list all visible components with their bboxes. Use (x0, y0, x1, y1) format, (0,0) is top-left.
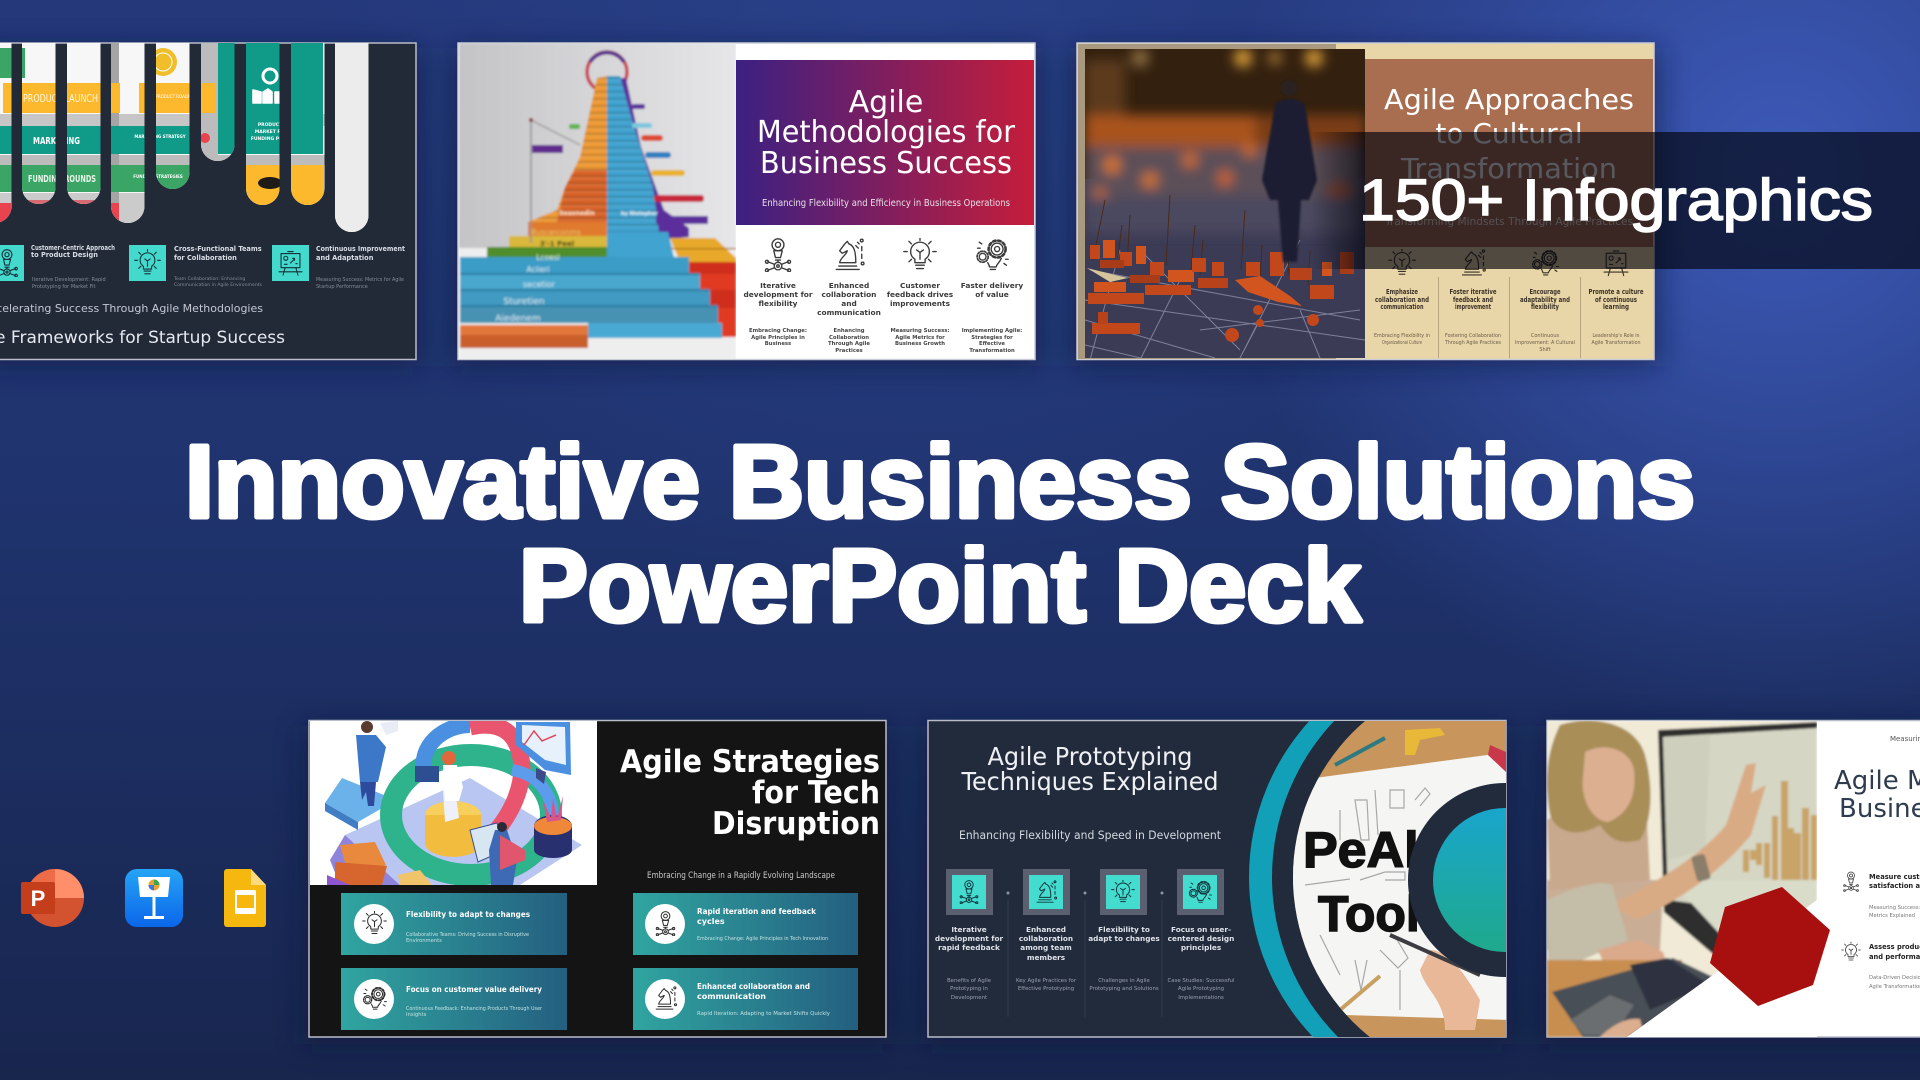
card: enhanced collaboration: communication (697, 992, 766, 1001)
text: cross functional teams: for Collaboration (174, 254, 237, 262)
text: customer centric approach: Iterative Development: Rapid (32, 277, 106, 283)
text: customer centric approach: Customer-Centric Approach (31, 244, 115, 252)
text: continuous improvement (316, 245, 405, 290)
column sublabels: Benefits of Agile (947, 978, 992, 984)
icon: continuous improvement (272, 245, 309, 281)
panel: Agile Strategies for Tech Disruption slide (309, 720, 886, 1037)
column sublabels: Prototyping and Solutions (1089, 986, 1159, 992)
column labels: Flexibility to (1098, 925, 1150, 934)
column labels: communication (1380, 303, 1424, 311)
slide title (757, 85, 1016, 181)
text: cross functional teams: Communication in Agile Environments (174, 282, 263, 288)
image: rainbow staircase: secetior (523, 280, 556, 289)
column labels: development for (935, 934, 1003, 943)
text: cross functional teams: Team Collaboration: Enhancing (173, 276, 245, 282)
icon: businessman silhouette (1262, 80, 1317, 262)
slide title: Agile Strategies (620, 744, 880, 780)
image: rainbow staircase: Sturetien (503, 297, 545, 307)
column labels: feedback and (1453, 296, 1493, 304)
column sublabels: Prototyping in (950, 986, 988, 992)
chart: startup roadmap columns: PRODUCT ROADMAP (155, 94, 197, 99)
column labels: principles (1181, 943, 1221, 952)
column sublabels: Organizational Culture (1382, 340, 1422, 346)
image: rainbow staircase: by Niotepher (621, 211, 658, 217)
column sublabels: Implementations (1178, 995, 1224, 1001)
chart: startup roadmap columns: MARKETING (33, 136, 80, 147)
image: isometric team illustration (310, 721, 597, 885)
chart: startup roadmap columns: MARKET FIT (255, 129, 286, 135)
column labels: adapt to changes (1088, 934, 1160, 943)
text: continuous improvement: Measuring Success: Metrics for Agile (316, 277, 404, 283)
column labels: flexibility (758, 299, 798, 308)
column labels: Customer (900, 281, 940, 290)
column labels: Encourage (1530, 288, 1561, 296)
column labels: among team (1020, 943, 1072, 952)
image: rainbow staircase: Seaxnedin (559, 210, 595, 217)
column labels: communication (817, 308, 881, 317)
chart: startup roadmap columns: FUNDING ROUNDS (28, 174, 96, 185)
column labels: Enhanced (829, 281, 869, 290)
chart: startup roadmap columns (0, 40, 375, 240)
text: customer centric approach (31, 244, 115, 290)
image: circular tool sketch photo: PeAk (1303, 822, 1433, 878)
slide title: Agile Prototyping (988, 742, 1192, 771)
icon: customer centric (0, 245, 24, 281)
column labels: collaboration and (1375, 296, 1429, 304)
card: customer value (341, 968, 567, 1030)
text: cross functional teams (173, 245, 263, 288)
text: cross functional teams: Cross-Functional Teams (174, 245, 262, 253)
slide title (620, 744, 880, 842)
icon: PowerPoint: P (31, 886, 45, 911)
slide title (961, 742, 1218, 796)
column labels: improvement (1455, 303, 1491, 311)
image: circular tool sketch photo (1249, 721, 1506, 1037)
column sublabels: Agile Principles in (751, 335, 805, 341)
column sublabels: Embracing Change: (749, 328, 807, 334)
card: rapid iteration (633, 893, 858, 955)
column sublabels: Shift (1539, 347, 1551, 353)
title: Innovative Business Solutions (185, 424, 1695, 539)
column labels: development for (743, 290, 813, 299)
column labels: Iterative (951, 925, 987, 934)
column sublabels: Strategies for (971, 335, 1013, 341)
shape: red hexagon (1710, 887, 1830, 1006)
icon row (765, 238, 1008, 272)
column sublabels: Business (765, 341, 791, 347)
column dividers (1438, 277, 1580, 358)
image: woman pointing at chart (1545, 721, 1817, 1037)
slide title: Methodologies for (757, 115, 1016, 150)
column sublabels: Transformation (969, 348, 1015, 354)
slide title: Agile (849, 85, 923, 120)
slide title: Business Success (760, 146, 1012, 181)
card: enhanced collaboration: Rapid Iteration: Adapting to Market Shifts Quickly (697, 1011, 830, 1017)
column sublabels: Implementing Agile: (962, 328, 1022, 334)
card: flexibility: Flexibility to adapt to changes (406, 910, 530, 919)
card: rapid iteration: Rapid iteration and feedback (697, 907, 817, 916)
column labels: collaboration (1019, 934, 1073, 943)
column labels: centered design (1168, 934, 1234, 943)
chart: startup roadmap columns: PRODUCT LAUNCH (23, 92, 98, 105)
item: assess product quality (1842, 942, 1920, 990)
column labels: and (841, 299, 857, 308)
card: flexibility: Environments (406, 938, 442, 944)
column labels (743, 281, 1023, 317)
slide title: Transformation (1400, 152, 1617, 185)
column sublabels: Collaboration (829, 335, 869, 341)
column sublabels: Agile Metrics for (895, 335, 945, 341)
image: businessman on city map (1085, 49, 1365, 360)
step separators (1006, 892, 1164, 1017)
column sublabels: Business Growth (895, 341, 945, 347)
header panel (1365, 59, 1653, 247)
column labels: rapid feedback (938, 943, 1000, 952)
column labels: improvements (890, 299, 951, 308)
icon row (946, 869, 1224, 915)
item: measure customer satisfaction: Metrics Explained (1869, 913, 1915, 919)
column sublabels: Effective (979, 341, 1005, 347)
card: customer value: Continuous Feedback: Enhancing Products Through User (406, 1006, 543, 1012)
image: rainbow staircase: Lcoesl (536, 253, 560, 262)
icon: PowerPoint (21, 869, 84, 927)
panel: Agile Metrics for Business slide (1545, 720, 1920, 1037)
title (185, 424, 1695, 643)
text: continuous improvement: Continuous Improvement (316, 245, 405, 253)
text: customer centric approach: to Product Design (31, 251, 98, 259)
column labels: Iterative (760, 281, 796, 290)
column sublabels: Enhancing (833, 328, 865, 334)
column sublabels: Continuous (1531, 333, 1560, 339)
column labels: members (1027, 953, 1065, 962)
image: rainbow staircase: Aciieri (526, 265, 550, 274)
column labels: of value (975, 290, 1009, 299)
column sublabels: Key Agile Practices for (1016, 978, 1077, 984)
subtitle: Embracing Change in a Rapidly Evolving Landscape (647, 871, 835, 881)
column sublabels: Through Agile Practices (1444, 340, 1501, 346)
chart: startup roadmap columns: PRODUCT (258, 122, 283, 128)
image: circular tool sketch photo: Tool (1318, 886, 1420, 942)
image: rainbow staircase: Buscerconms (531, 228, 581, 237)
image: rainbow staircase: Aiedenem (495, 314, 541, 324)
column labels: Focus on user- (1171, 925, 1231, 934)
text: continuous improvement: Startup Performance (316, 284, 368, 290)
card: rapid iteration: cycles (697, 917, 725, 926)
column sublabels: Embracing Flexibility in (1374, 333, 1430, 339)
column labels: Faster delivery (961, 281, 1023, 290)
column labels (935, 925, 1234, 962)
panel: Agile Approaches to Cultural Transformation slide (1077, 43, 1654, 360)
card: rapid iteration: Embracing Change: Agile Principles in Tech Innovation (697, 936, 828, 942)
image: rainbow staircase (459, 43, 736, 360)
icon: Keynote (125, 869, 183, 927)
card: flexibility (341, 893, 567, 955)
subtitle: Enhancing Flexibility and Speed in Development (959, 829, 1222, 842)
text: continuous improvement: and Adaptation (316, 254, 374, 262)
column labels: Enhanced (1026, 925, 1066, 934)
card: flexibility: Collaborative Teams: Driving Success in Disruptive (406, 932, 529, 938)
column sublabels: Case Studies: Successful (1168, 978, 1234, 984)
card: customer value: Focus on customer value delivery (406, 985, 543, 994)
column sublabels: Effective Prototyping (1018, 986, 1074, 992)
chart: startup roadmap columns: FUNDING STRATEGIES (133, 174, 183, 179)
callout: 150+ Infographics band (1310, 132, 1920, 269)
icon: Google Slides (224, 869, 266, 927)
card: customer value: Insights (406, 1012, 427, 1018)
icon: cross functional teams (129, 245, 166, 281)
column labels: Promote a culture (1588, 288, 1644, 296)
slide title (1834, 766, 1920, 824)
panel: Agile Frameworks for Startup Success slide (0, 40, 416, 360)
column sublabels: Leadership's Role in (1592, 333, 1640, 339)
column sublabels: Practices (835, 348, 863, 354)
column labels: Emphasize (1386, 288, 1418, 296)
slide title (1384, 83, 1634, 185)
column labels: adaptability and (1520, 296, 1570, 304)
slide title: to Cultural (1435, 117, 1583, 150)
subtitle: Enhancing Flexibility and Efficiency in Business Operations (762, 198, 1010, 209)
subtitle: Transforming Mindsets Through Agile Practices (1384, 216, 1633, 228)
column sublabels (749, 328, 1022, 354)
chart: startup roadmap columns: FUNDING PLAN (251, 136, 289, 142)
text: customer centric approach: Prototyping for Market Fit (32, 284, 96, 290)
image: rainbow staircase: 3'-1 Peel (540, 240, 574, 248)
slide title: Agile Approaches (1384, 83, 1634, 116)
column sublabels: Through Agile (828, 341, 870, 347)
column sublabels (1374, 333, 1640, 353)
title: PowerPoint Deck (519, 528, 1362, 643)
card: enhanced collaboration: Enhanced collaboration and (697, 982, 810, 991)
column sublabels: Measuring Success: (890, 328, 950, 334)
column labels: Foster iterative (1450, 288, 1497, 296)
column sublabels: Agile Prototyping (1178, 986, 1224, 992)
column sublabels: Agile Transformation (1592, 340, 1640, 346)
column sublabels: Development (951, 995, 987, 1001)
panel: Agile Prototyping Techniques Explained slide (927, 720, 1507, 1038)
column labels: collaboration (822, 290, 876, 299)
column labels: of continuous (1595, 296, 1637, 304)
panel: Agile Methodologies for Business Success slide (458, 43, 1035, 360)
column sublabels (947, 978, 1234, 1001)
slide title: Techniques Explained (961, 767, 1218, 796)
column labels: feedback drives (887, 290, 954, 299)
chart: startup roadmap columns: MARKETING STRATEGY (134, 134, 186, 139)
slide title: Disruption (712, 806, 880, 842)
card: enhanced collaboration (633, 968, 858, 1030)
column labels: flexibility (1531, 303, 1559, 311)
header panel (736, 60, 1034, 225)
column sublabels: Challenges in Agile (1098, 978, 1150, 984)
item: measure customer satisfaction (1844, 872, 1920, 919)
column labels: learning (1603, 303, 1629, 311)
column sublabels: Fostering Collaboration (1445, 333, 1501, 339)
slide title: for Tech (752, 775, 880, 811)
column sublabels: Improvement: A Cultural (1515, 340, 1575, 346)
column labels (1375, 288, 1644, 311)
callout: 150+ Infographics band: 150+ Infographics (1359, 168, 1873, 233)
icon row (1389, 249, 1628, 276)
